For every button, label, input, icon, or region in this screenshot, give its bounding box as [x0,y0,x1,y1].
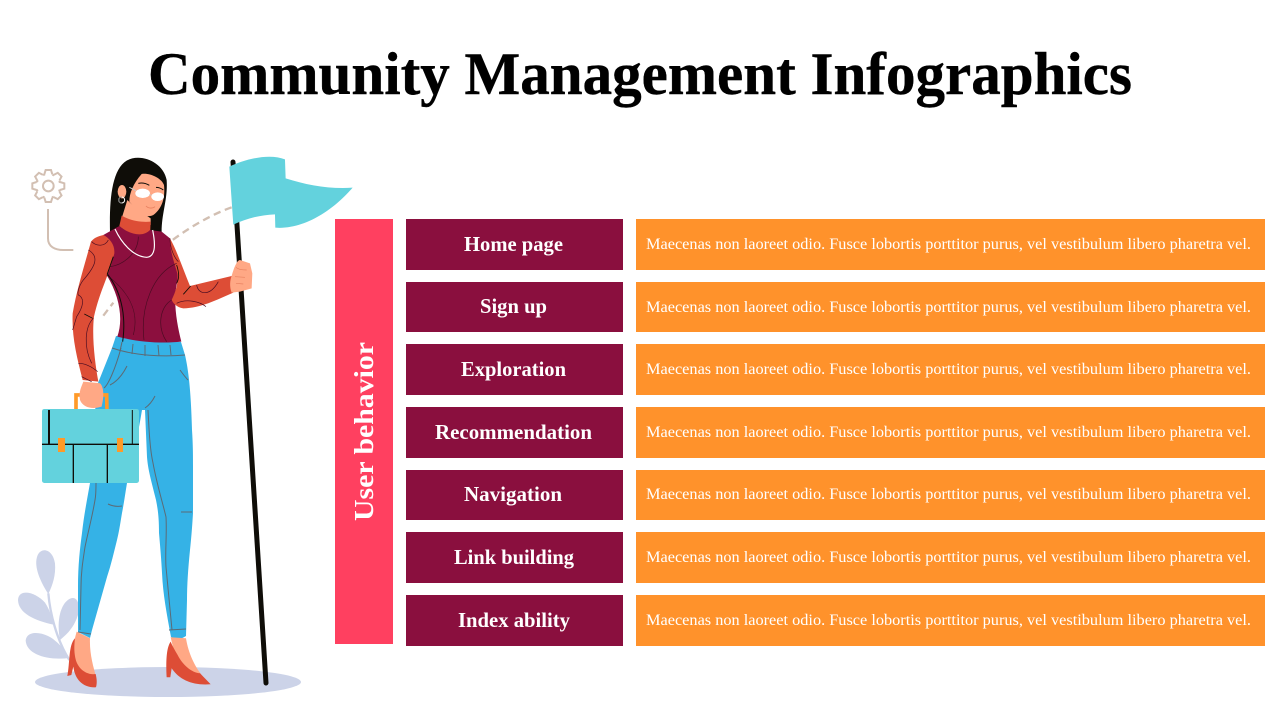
row: Exploration: Exploration [461,357,566,381]
row: Index ability: Index ability [458,608,570,632]
row: Recommendation: Maecenas non laoreet odio. Fusce lobortis porttitor purus, vel vestibulum libero pharetra vel. [646,424,1251,441]
row: Sign up: Maecenas non laoreet odio. Fusce lobortis porttitor purus, vel vestibulum libero pharetra vel. [646,299,1251,316]
flag [229,157,353,228]
flag pole [233,162,266,683]
row: Link building [406,532,1265,583]
legs and jeans [78,336,193,639]
row: Index ability: Maecenas non laoreet odio. Fusce lobortis porttitor purus, vel vestibulum libero pharetra vel. [646,612,1251,629]
row: Navigation: Maecenas non laoreet odio. Fusce lobortis porttitor purus, vel vestibulum libero pharetra vel. [646,486,1251,503]
hair [110,158,167,233]
row: Recommendation [406,407,1265,458]
side banner: User behavior: User behavior [349,342,379,521]
upper body [73,174,252,411]
row: Sign up: Sign up [480,294,547,318]
row: Link building: Maecenas non laoreet odio. Fusce lobortis porttitor purus, vel vestibulum libero pharetra vel. [646,549,1251,566]
left sleeve [73,235,114,382]
plant [18,550,79,660]
turtleneck [119,216,151,237]
row: Home page: Home page [464,232,563,256]
briefcase handle [76,395,107,411]
row: Home page: Maecenas non laoreet odio. Fusce lobortis porttitor purus, vel vestibulum libero pharetra vel. [646,236,1251,253]
illustration: woman with flag and briefcase [18,157,353,697]
right sleeve [170,238,233,308]
ear [118,185,126,198]
row: Exploration: Maecenas non laoreet odio. Fusce lobortis porttitor purus, vel vestibulum libero pharetra vel. [646,361,1251,378]
row: Navigation [406,470,1265,520]
garment linework [73,237,218,382]
necklace [115,229,154,257]
left hand [80,382,103,408]
ground shadow [35,667,301,697]
neck [122,200,151,225]
dashed arc path [103,207,232,316]
face [129,174,164,216]
row: Exploration [406,344,1265,395]
jeans seams [78,342,192,634]
briefcase [42,409,139,483]
glasses and face details [135,189,150,198]
side banner: User behavior [335,219,393,644]
row: Navigation: Navigation [464,482,562,506]
row: Index ability [406,595,1265,646]
row: Recommendation: Recommendation [435,420,592,444]
title: Community Management Infographics [148,41,1132,107]
icon: gear with connector [32,170,73,250]
row: Link building: Link building [454,545,574,569]
right hand [230,260,252,293]
row: Home page [406,219,1265,270]
torso [103,226,181,343]
row: Sign up [406,282,1265,332]
shoes and feet [67,632,211,687]
